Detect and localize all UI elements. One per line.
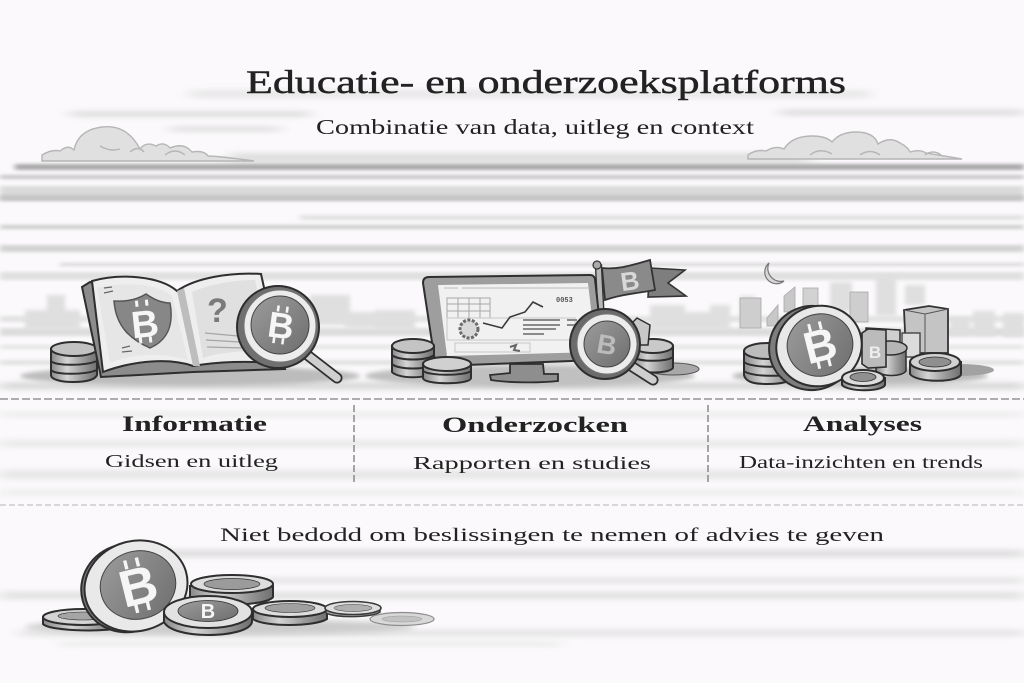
coin sixth bbox=[370, 612, 434, 626]
illustration: coin pile bbox=[25, 528, 434, 644]
cloud right bbox=[748, 132, 962, 159]
flag bbox=[593, 260, 686, 325]
coin back bbox=[190, 575, 273, 604]
coin right bbox=[910, 353, 961, 381]
big coin: B bbox=[113, 554, 164, 620]
coin front bbox=[842, 370, 885, 390]
divider column 1 bbox=[353, 405, 355, 485]
illustration: coins and charts bbox=[732, 263, 994, 401]
heading: Informatie: Informatie bbox=[122, 411, 267, 436]
back stacks bbox=[862, 328, 907, 376]
gear bbox=[460, 320, 478, 338]
coin fourth bbox=[253, 601, 327, 625]
line chart bbox=[483, 302, 543, 328]
shield bbox=[114, 294, 171, 348]
magnifier bbox=[237, 286, 337, 378]
subtitle: Combinatie van data, uitleg en context bbox=[316, 115, 754, 139]
magnifier: B bbox=[595, 329, 619, 361]
cloud left bbox=[42, 127, 254, 161]
title: Educatie- en onderzoeksplatforms bbox=[246, 65, 846, 101]
text: Gidsen en uitleg: Gidsen en uitleg bbox=[105, 451, 278, 471]
column: Onderzoeken bbox=[413, 412, 651, 473]
text: Rapporten en studies: Rapporten en studies bbox=[413, 453, 651, 473]
heading: Analyses: Analyses bbox=[803, 411, 923, 436]
crescent bbox=[765, 263, 784, 284]
value label: 0053 bbox=[556, 297, 573, 305]
big coin bbox=[71, 528, 198, 644]
big coin: B bbox=[798, 317, 842, 374]
coin front: B bbox=[201, 601, 215, 623]
screen frame bbox=[423, 275, 603, 366]
magnifier bbox=[570, 309, 653, 380]
question mark: ? bbox=[207, 292, 228, 330]
coin stack right bbox=[625, 318, 673, 372]
heading: Onderzoeken: Onderzocken bbox=[442, 412, 628, 437]
column: Analyses bbox=[739, 411, 983, 472]
small card bitcoin: B bbox=[869, 343, 881, 362]
disclaimer: Niet bedodd om beslissingen te nemen of advies te geven bbox=[220, 526, 884, 546]
illustration: book bbox=[20, 274, 360, 386]
magnifier: B bbox=[265, 303, 297, 348]
illustration: monitor bbox=[365, 260, 699, 387]
stand bbox=[490, 364, 558, 382]
coin far left bbox=[43, 609, 123, 630]
screen bbox=[438, 283, 596, 356]
divider top bbox=[0, 398, 1024, 400]
column: Informatie bbox=[105, 411, 278, 471]
stack left bbox=[744, 343, 798, 384]
big coin bbox=[758, 295, 872, 401]
coin front bbox=[164, 596, 252, 635]
flag: B bbox=[618, 265, 641, 297]
background skyline bbox=[25, 276, 1024, 337]
stacks left bbox=[392, 339, 471, 383]
divider column 2 bbox=[707, 405, 709, 485]
divider bottom bbox=[0, 504, 1024, 506]
cube bbox=[904, 306, 948, 353]
coin stack behind book bbox=[51, 342, 97, 382]
dashboard rows bbox=[523, 320, 577, 334]
bitcoin mark on shield: B bbox=[129, 303, 161, 347]
skyline bars bbox=[740, 287, 868, 328]
dashboard table bbox=[444, 288, 590, 352]
text: Data-inzichten en trends: Data-inzichten en trends bbox=[739, 452, 983, 472]
coin fifth bbox=[325, 602, 381, 617]
